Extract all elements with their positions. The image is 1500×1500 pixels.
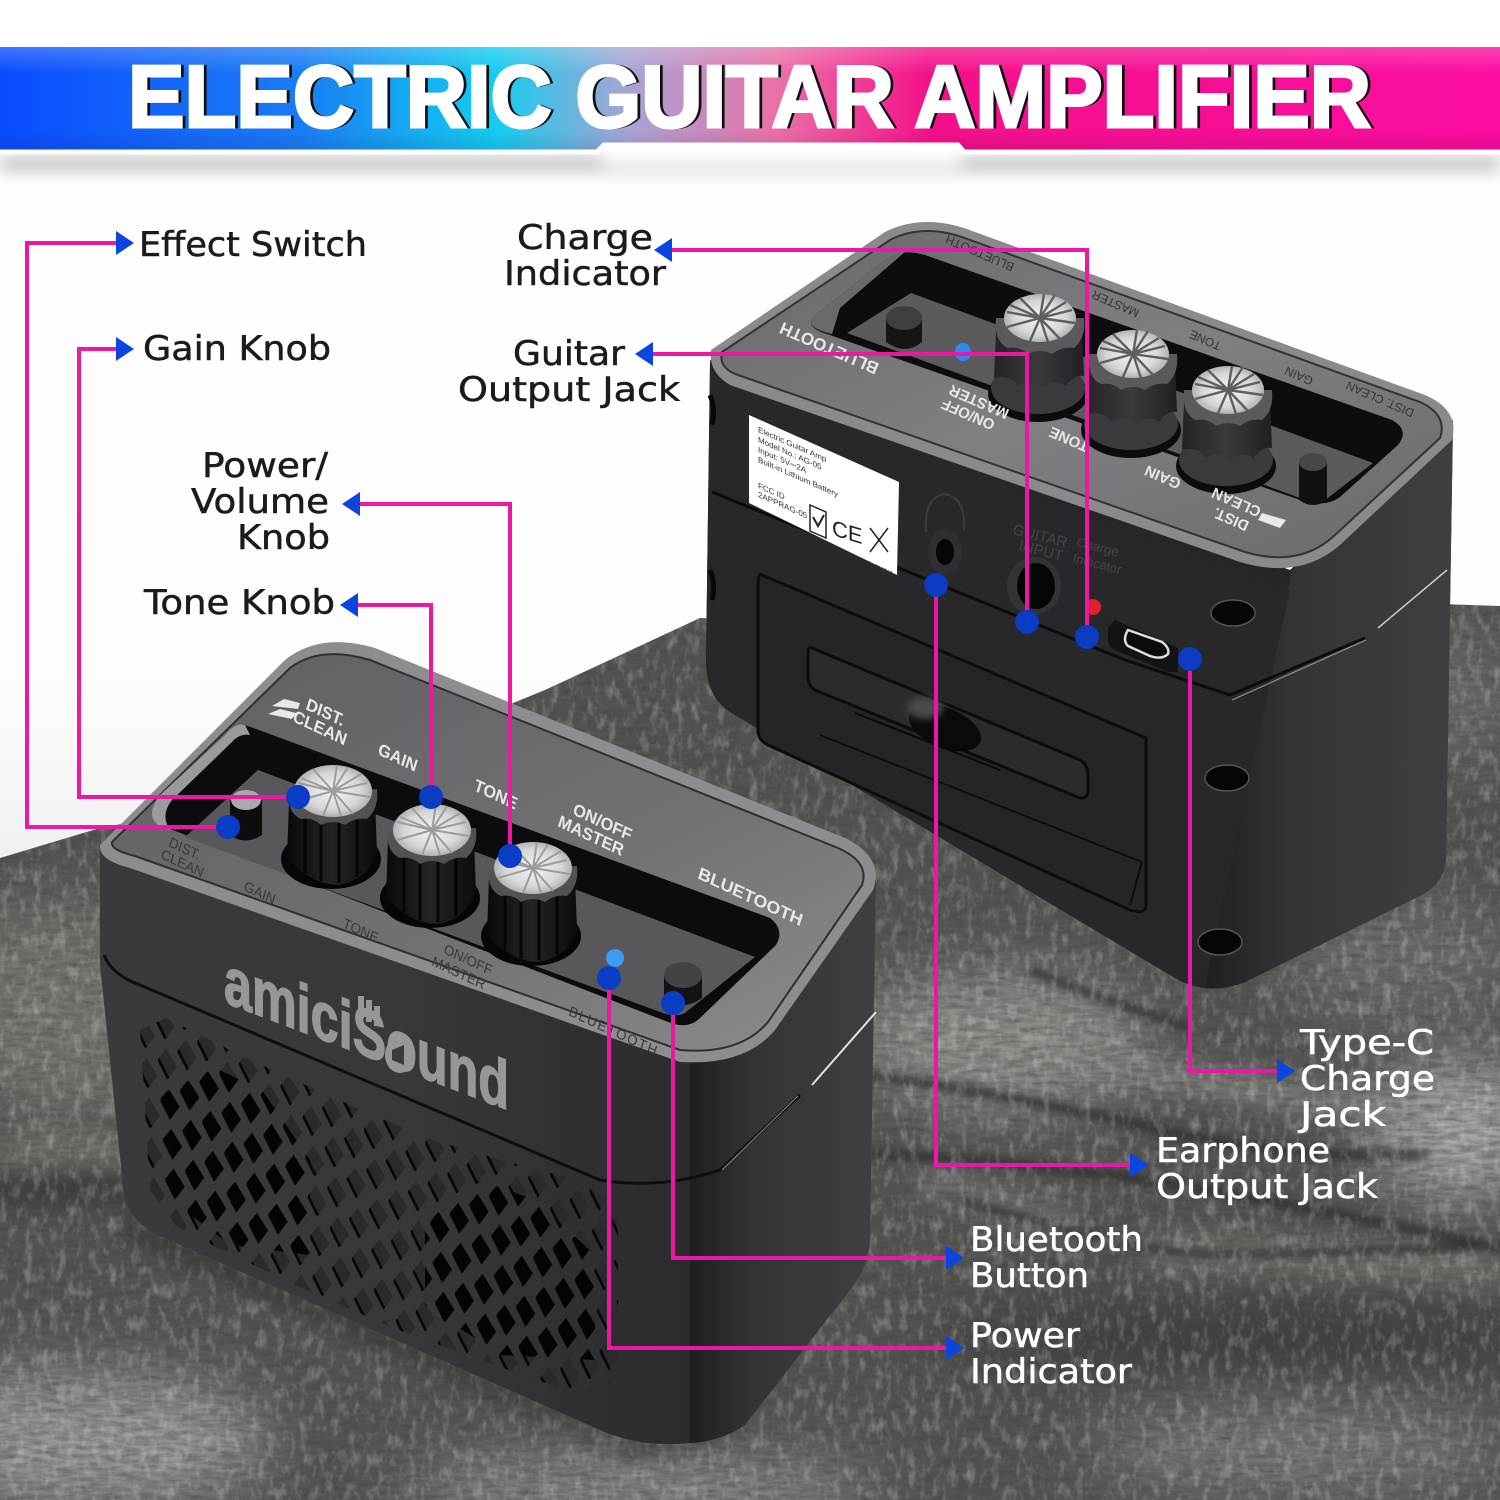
rear face labels: CLEAN (1209, 484, 1264, 520)
callout: tone knob: Tone Knob (143, 583, 335, 623)
callout: type-c charge jack: Charge (1300, 1059, 1435, 1099)
front top face (112, 654, 864, 1051)
callout: earphone output jack: Output Jack (1156, 1167, 1378, 1207)
callout: type-c charge jack (1178, 647, 1435, 1135)
engraved lower labels: DIST. (167, 834, 203, 863)
rear face labels: GAIN (1142, 461, 1184, 492)
recess (811, 252, 1403, 503)
rating label: 2APPRAG-05 (758, 489, 808, 521)
rear face labels (777, 232, 1416, 534)
callout: effect switch (27, 225, 367, 839)
engraved lower labels: GAIN (242, 878, 278, 907)
knob tone rear (1081, 330, 1181, 458)
rear face labels: GAIN (1283, 364, 1315, 388)
title banner (0, 47, 1500, 152)
callout: charge indicator: Charge (517, 218, 653, 258)
upper top-face labels: BLUETOOTH (696, 864, 805, 930)
rear face labels: DIST. (1211, 504, 1252, 534)
guitar input jack: GUITAR (1011, 521, 1069, 551)
rating label: CE (832, 515, 863, 549)
engraved lower labels: ON/OFF (442, 941, 494, 978)
upper top-face labels: ON/OFF (571, 800, 634, 845)
title: ELECTRIC GUITAR AMPLIFIER (131, 47, 1374, 146)
callout: bluetooth button: Button (970, 1256, 1089, 1296)
rating label: FCC ID (758, 480, 785, 502)
bluetooth button (664, 962, 702, 1006)
rear face labels: MASTER (1089, 287, 1141, 320)
callout: bluetooth button (661, 991, 1143, 1296)
effect switch (230, 790, 262, 840)
type-c port (1108, 620, 1178, 672)
engraved lower labels (159, 834, 659, 1059)
rear face labels: BLUETOOTH (943, 232, 1016, 274)
upper top-face labels: GAIN (376, 740, 420, 776)
top face (711, 222, 1453, 568)
upper top-face labels: MASTER (556, 812, 626, 860)
charge indicator: Indicator (1071, 550, 1124, 577)
recess floor (185, 770, 755, 1015)
callout: earphone output jack: Earphone (1156, 1131, 1330, 1171)
speaker grille (140, 1018, 618, 1388)
callout: power volume knob: Volume (191, 482, 329, 522)
upper top-face labels: CLEAN (291, 707, 349, 749)
battery door (758, 574, 1146, 912)
rear face labels: ON/OFF (939, 395, 998, 433)
engraved lower labels: CLEAN (159, 846, 206, 880)
callout: power volume knob (191, 446, 522, 868)
rear face labels: MASTER (946, 381, 1012, 422)
rear body (706, 360, 1453, 989)
earphone jack (926, 494, 964, 575)
power led (606, 949, 624, 967)
callout: guitar output jack: Guitar (513, 334, 625, 374)
callout: power indicator: Indicator (970, 1352, 1132, 1392)
front knob tone (380, 804, 480, 928)
charge indicator: Charge (1075, 534, 1120, 559)
callout: gain knob: Gain Knob (143, 329, 331, 369)
callout: guitar output jack: Output Jack (458, 370, 680, 410)
side holes (1198, 600, 1255, 955)
front body right face (690, 880, 876, 1443)
bluetooth button (886, 306, 922, 349)
upper top-face labels: DIST. (304, 695, 347, 730)
recess (152, 724, 779, 1025)
callout: effect switch: Effect Switch (139, 225, 367, 265)
front knob master (481, 842, 581, 966)
upper top-face labels: TONE (472, 776, 520, 814)
front knob gain (281, 765, 381, 889)
front body left face (100, 845, 690, 1444)
callout: power indicator: Power (970, 1316, 1080, 1356)
grille open holes (161, 1070, 595, 1360)
knob gain rear (1176, 366, 1276, 494)
callout: power volume knob: Knob (237, 518, 330, 558)
rating label: Input: 5V⎓2A (758, 444, 806, 475)
rear face labels: BLUETOOTH (777, 318, 882, 378)
engraved lower labels: TONE (341, 915, 381, 946)
callout: earphone output jack (924, 573, 1378, 1207)
rating label: Built-in Lithium Battery (758, 454, 839, 499)
rating label: Electric Guitar Amp (758, 424, 827, 464)
title: ELECTRIC GUITAR AMPLIFIER (128, 47, 1371, 146)
logo: amiciSound (224, 940, 509, 1125)
callout: gain knob (79, 329, 331, 809)
callout: charge indicator (504, 218, 1099, 649)
rear knobs (988, 294, 1088, 422)
callout: charge indicator: Indicator (504, 254, 666, 294)
rear led (955, 343, 971, 361)
rear amplifier (706, 222, 1453, 989)
upper top-face labels (268, 695, 805, 930)
rock surface (0, 604, 1500, 1500)
effect switch rear (1299, 453, 1327, 505)
callout: bluetooth button: Bluetooth (970, 1220, 1143, 1260)
engraved lower labels: BLUETOOTH (567, 1003, 659, 1059)
rating label: Model No.: AG-05 (758, 434, 822, 472)
callout: power volume knob: Power/ (202, 446, 329, 486)
charge indicator (1071, 534, 1124, 615)
band shadow (0, 156, 1500, 172)
rating label: MADE IN CHINA (848, 551, 894, 578)
callout: type-c charge jack: Type-C (1299, 1023, 1434, 1063)
callout: tone knob (143, 583, 443, 809)
guitar input jack (1007, 521, 1069, 615)
rear face labels: DIST. CLEAN (1344, 378, 1416, 420)
front shadow (120, 1210, 760, 1460)
rear face labels: TONE (1047, 423, 1092, 455)
guitar input jack: INPUT (1017, 537, 1065, 565)
front top face rim (100, 642, 876, 1062)
engraved lower labels: MASTER (430, 953, 487, 992)
logo (224, 940, 509, 1125)
callout: guitar output jack (458, 334, 1039, 634)
rating label (749, 415, 899, 578)
front amplifier (100, 642, 876, 1460)
callout: type-c charge jack: Jack (1298, 1095, 1386, 1135)
callout: power indicator (597, 966, 1132, 1392)
rear face labels: TONE (1187, 327, 1223, 353)
